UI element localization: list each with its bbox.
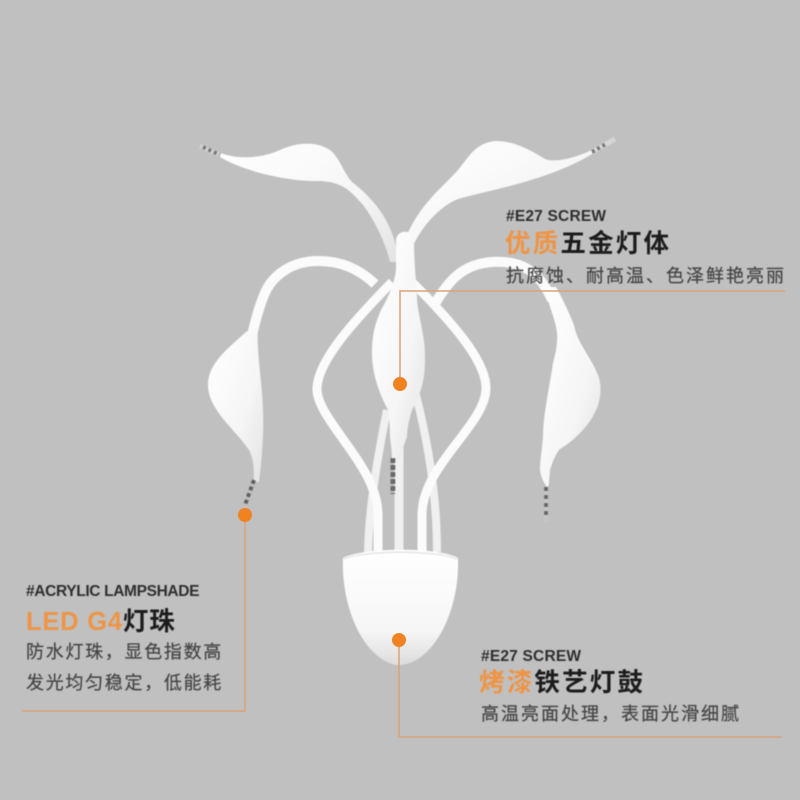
dot: top xyxy=(393,377,407,391)
text block: LED beads xyxy=(26,583,223,692)
right arm xyxy=(436,262,552,302)
text block: hardware body xyxy=(505,208,786,286)
left connector xyxy=(245,480,254,505)
diamond arm: right xyxy=(412,282,486,552)
description: 高温亮面处理，表面光滑细腻 xyxy=(481,704,741,724)
callout line: top xyxy=(400,291,785,383)
left bulb xyxy=(208,326,263,482)
lamp xyxy=(200,139,615,665)
heading: 优质五金灯体 xyxy=(505,230,671,258)
lower stems xyxy=(368,395,437,552)
heading: LED G4灯珠 xyxy=(26,608,176,636)
heading: 烤漆铁艺灯鼓 xyxy=(479,669,645,697)
callout line: left xyxy=(22,515,245,711)
right connector xyxy=(544,487,548,522)
right bulb xyxy=(540,287,600,487)
center connector xyxy=(390,458,396,494)
description: 抗腐蚀、耐高温、色泽鲜艳亮丽 xyxy=(506,266,786,286)
top-left connector xyxy=(200,146,220,155)
dot: bottom xyxy=(392,633,406,647)
tag: #E27 SCREW xyxy=(481,648,581,665)
top-left leaf xyxy=(220,144,398,262)
description: 发光均匀稳定，低能耗 xyxy=(26,672,223,692)
dot: left xyxy=(238,508,252,522)
callout line: bottom xyxy=(399,640,782,737)
left arm xyxy=(250,261,375,345)
center stem and bulb xyxy=(372,232,425,460)
diamond arm: left xyxy=(317,282,392,552)
text block: painted drum xyxy=(479,648,741,724)
tag: #ACRYLIC LAMPSHADE xyxy=(26,583,199,600)
description: 防水灯珠，显色指数高 xyxy=(26,642,223,662)
top-right leaf xyxy=(405,141,592,246)
bowl base xyxy=(343,550,458,665)
bowl rim xyxy=(344,552,457,559)
description xyxy=(26,642,223,692)
tag: #E27 SCREW xyxy=(506,208,606,225)
top-right connector xyxy=(592,139,615,152)
